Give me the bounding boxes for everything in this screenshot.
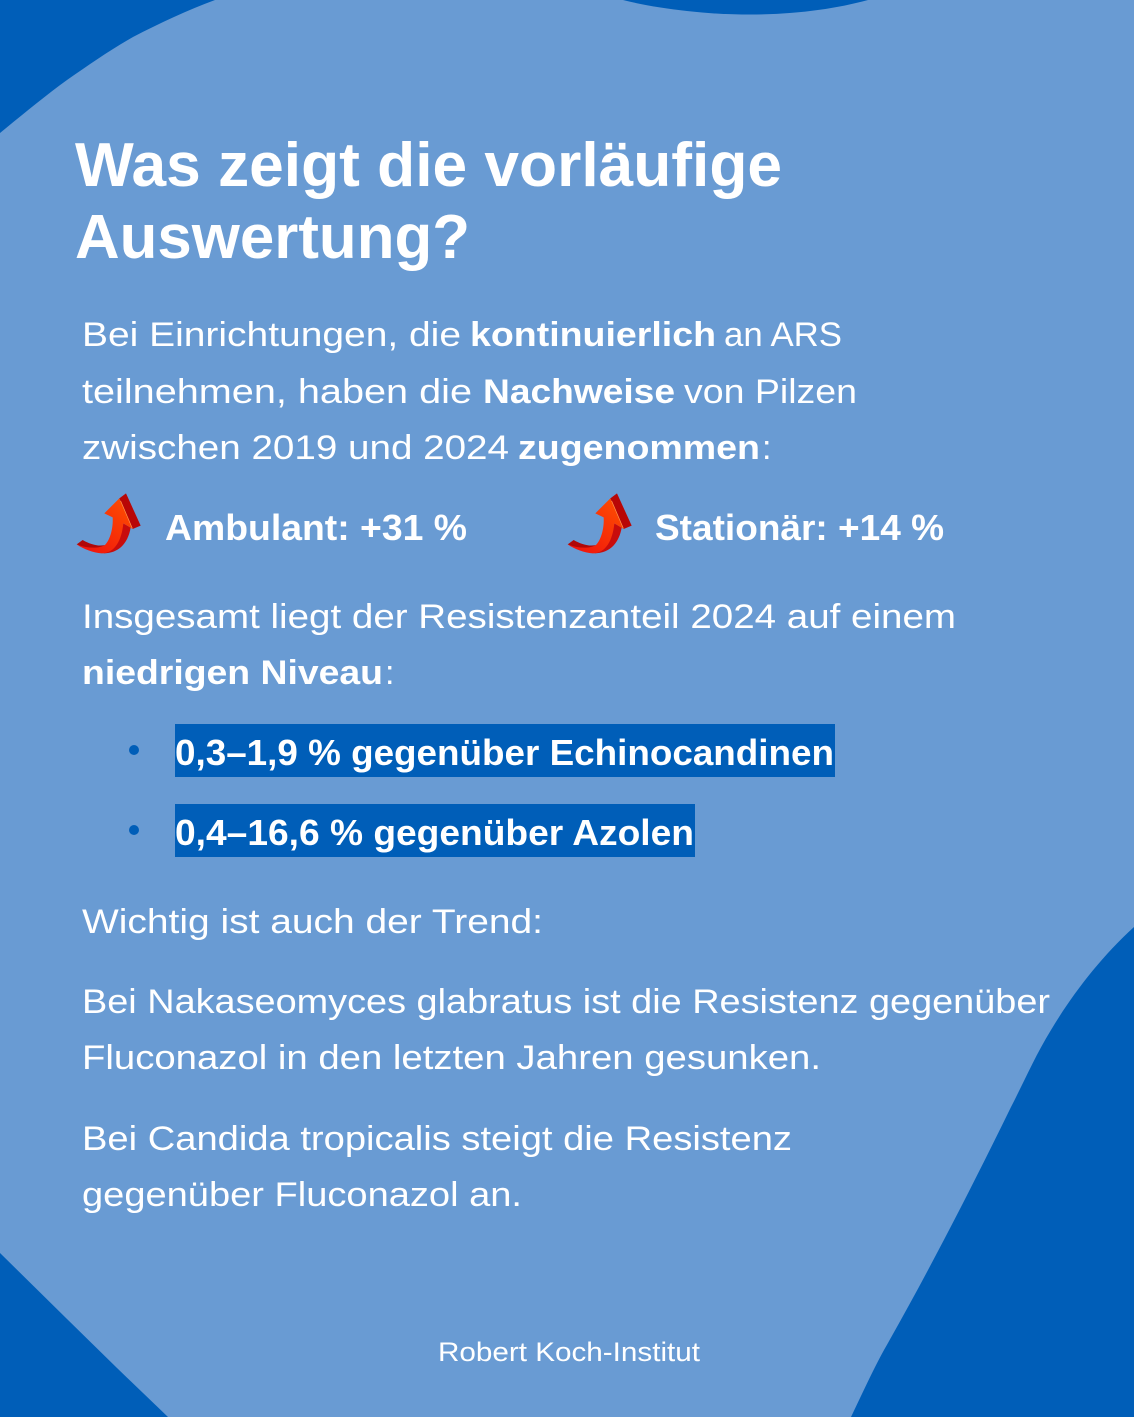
footer: source: Robert Koch-Institut bbox=[438, 1337, 701, 1367]
stat: ambulant: Ambulant: +31 % bbox=[165, 507, 467, 548]
resistance paragraph: : bbox=[385, 654, 394, 692]
shape: top edge bbox=[623, 0, 868, 14]
intro paragraph: kontinuierlich bbox=[470, 316, 716, 354]
text: Candida tropicalis bbox=[82, 1120, 792, 1214]
bullet: azole bbox=[129, 804, 695, 857]
intro paragraph: Nachweise bbox=[483, 373, 675, 411]
title bbox=[75, 131, 782, 272]
intro paragraph: von Pilzen bbox=[684, 373, 857, 411]
resistance paragraph bbox=[82, 598, 956, 692]
text: Candida tropicalis: Bei Candida tropicalis steigt die Resistenz bbox=[82, 1120, 792, 1158]
title: Auswertung? bbox=[75, 203, 470, 272]
title: Was zeigt die vorläufige bbox=[75, 131, 782, 200]
corner shape: bottom left bbox=[0, 1253, 168, 1417]
intro paragraph: zwischen 2019 und 2024 bbox=[82, 429, 509, 467]
corner shape: bottom right bbox=[851, 927, 1134, 1417]
corner shape: top left bbox=[0, 0, 215, 133]
intro paragraph: teilnehmen, haben die bbox=[82, 373, 472, 411]
intro paragraph: zugenommen bbox=[518, 429, 760, 467]
intro paragraph: Bei Einrichtungen, die bbox=[82, 316, 461, 354]
bullet: echinocandine: 0,3–1,9 % gegenüber Echinocandinen bbox=[175, 732, 834, 773]
bullet: azole: 0,4–16,6 % gegenüber Azolen bbox=[175, 812, 694, 853]
text: Nakaseomyces glabratus: Fluconazol in den letzten Jahren gesunken. bbox=[82, 1039, 821, 1077]
text: trend heading: Wichtig ist auch der Trend: bbox=[82, 903, 543, 941]
resistance paragraph: Insgesamt liegt der Resistenzanteil 2024 auf einem bbox=[82, 598, 956, 636]
stat: stationaer: Stationär: +14 % bbox=[655, 507, 944, 548]
text: Nakaseomyces glabratus bbox=[82, 983, 1050, 1077]
intro paragraph: : bbox=[762, 429, 771, 467]
intro paragraph bbox=[82, 316, 857, 467]
intro paragraph: an ARS bbox=[724, 316, 842, 354]
text: Nakaseomyces glabratus: Bei Nakaseomyces glabratus ist die Resistenz gegenüber bbox=[82, 983, 1050, 1021]
text: Candida tropicalis: gegenüber Fluconazol an. bbox=[82, 1176, 522, 1214]
icon: red arrow up, stationaer bbox=[568, 493, 632, 553]
resistance paragraph: niedrigen Niveau bbox=[82, 654, 383, 692]
icon: red arrow up, ambulant bbox=[77, 493, 141, 553]
